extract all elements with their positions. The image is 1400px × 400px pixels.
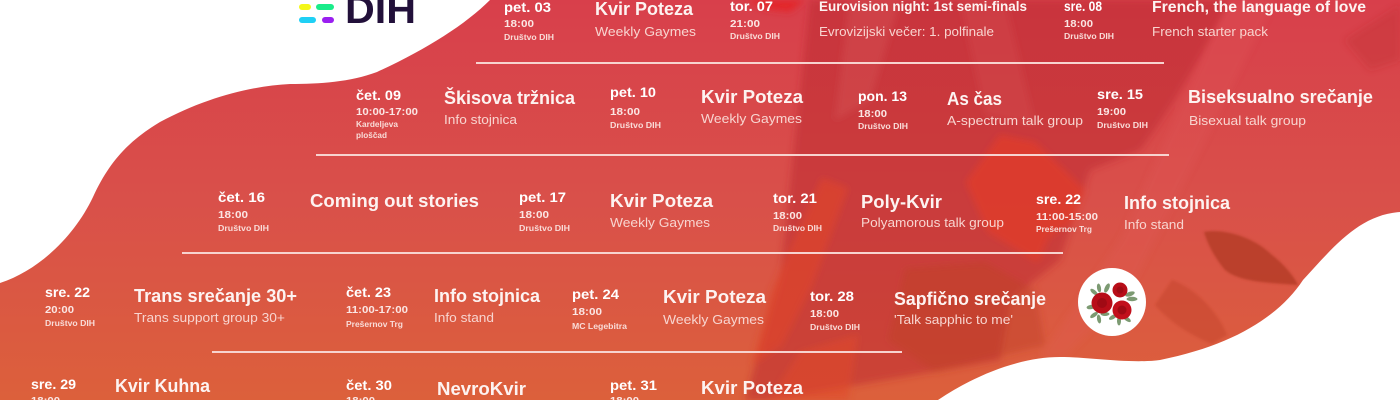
- event: pet. 24: pet. 24: [572, 286, 619, 302]
- event: sre. 15: Društvo DIH: [1097, 121, 1148, 130]
- event: pet. 24: [572, 286, 767, 331]
- event: tor. 28: 18:00: [810, 309, 839, 320]
- event: pet. 17: [519, 189, 714, 233]
- event: pet. 24: Weekly Gaymes: [663, 312, 765, 327]
- row 3 of events: [218, 189, 1231, 234]
- event: tor. 28: Sapfično srečanje: [894, 289, 1046, 309]
- event: tor. 28: tor. 28: [810, 288, 854, 304]
- event: tor. 21: [773, 190, 1004, 233]
- event: čet. 30: [346, 377, 526, 400]
- event: pet. 10: pet. 10: [610, 84, 656, 100]
- event: pon. 13: A-spectrum talk group: [947, 113, 1083, 128]
- event: pet. 03: Društvo DIH: [504, 33, 554, 42]
- event: sre. 22 trans group: [45, 284, 297, 328]
- event: čet. 09: Kardeljeva: [356, 120, 399, 129]
- event: pet. 31: Kvir Poteza: [701, 378, 804, 398]
- event: tor. 28: 'Talk sapphic to me': [894, 312, 1013, 327]
- event: pet. 03: Weekly Gaymes: [595, 24, 697, 39]
- event: sre. 15: Biseksualno srečanje: [1188, 87, 1373, 107]
- event: pet. 31: pet. 31: [610, 377, 657, 393]
- event: tor. 07: Evrovizijski večer: 1. polfinale: [819, 24, 994, 39]
- event: čet. 23: Info stojnica: [434, 286, 541, 306]
- icon: roses in white circle: [1078, 268, 1146, 336]
- event: pet. 17: Kvir Poteza: [610, 191, 714, 211]
- event: pon. 13: As čas: [947, 89, 1002, 109]
- event: sre. 22 info stand: sre. 22: [1036, 191, 1081, 207]
- event: tor. 21: Polyamorous talk group: [861, 215, 1004, 230]
- row 2 of events: [356, 84, 1373, 140]
- event: pon. 13: Društvo DIH: [858, 122, 908, 131]
- event: sre. 29: [31, 376, 211, 400]
- event: pet. 17: 18:00: [519, 210, 550, 221]
- event: pet. 10: Kvir Poteza: [701, 87, 804, 107]
- event: čet. 16: Društvo DIH: [218, 224, 269, 233]
- event: sre. 22 trans group: Društvo DIH: [45, 319, 95, 328]
- event: tor. 28: [810, 288, 1046, 332]
- row 4 of events: [45, 284, 1046, 332]
- event: sre. 22 info stand: [1036, 191, 1231, 234]
- event: čet. 09: Info stojnica: [444, 112, 518, 127]
- event: pet. 10: [610, 84, 804, 130]
- event: pet. 10: Weekly Gaymes: [701, 111, 803, 126]
- event: pon. 13: [858, 88, 1083, 131]
- event: pet. 10: 18:00: [610, 107, 641, 118]
- event: sre. 15: [1097, 86, 1373, 130]
- event: tor. 21: 18:00: [773, 211, 802, 222]
- event: pet. 10: Društvo DIH: [610, 121, 661, 130]
- event: sre. 22 trans group: 20:00: [45, 305, 74, 316]
- event: pon. 13: 18:00: [858, 109, 887, 120]
- event: sre. 08: 18:00: [1064, 19, 1093, 30]
- event: sre. 22 trans group: Trans support group 30+: [134, 310, 285, 325]
- event: sre. 22 info stand: Info stand: [1124, 217, 1184, 232]
- logo: DIH: [299, 0, 416, 32]
- event: pet. 03: 18:00: [504, 19, 535, 30]
- event: tor. 07: Društvo DIH: [730, 32, 780, 41]
- row 1 of events: [504, 0, 1366, 42]
- event: čet. 16: čet. 16: [218, 189, 265, 205]
- event: sre. 08: Društvo DIH: [1064, 32, 1114, 41]
- event: pet. 24: MC Legebitra: [572, 322, 628, 331]
- event: pet. 24: 18:00: [572, 307, 603, 318]
- event: tor. 07: [730, 0, 1027, 41]
- event: pet. 31: [610, 377, 804, 400]
- event: čet. 09: ploščad: [356, 131, 387, 140]
- event: pet. 03: [504, 0, 697, 42]
- event: čet. 09: čet. 09: [356, 87, 401, 103]
- event: sre. 22 trans group: Trans srečanje 30+: [134, 286, 297, 306]
- event: pon. 13: pon. 13: [858, 88, 907, 104]
- event: čet. 30: čet. 30: [346, 377, 392, 393]
- event: čet. 23: Info stand: [434, 310, 494, 325]
- event: čet. 23: čet. 23: [346, 284, 391, 300]
- event: sre. 29: sre. 29: [31, 376, 76, 392]
- event: sre. 15: 19:00: [1097, 107, 1126, 118]
- event: čet. 16: 18:00: [218, 210, 249, 221]
- event: sre. 15: Bisexual talk group: [1189, 113, 1306, 128]
- event: čet. 23: Prešernov Trg: [346, 320, 403, 329]
- event: tor. 07: 21:00: [730, 19, 761, 30]
- event: čet. 09: Škisova tržnica: [444, 87, 576, 108]
- event: sre. 15: sre. 15: [1097, 86, 1143, 102]
- event: tor. 21: tor. 21: [773, 190, 817, 206]
- event: pet. 17: Weekly Gaymes: [610, 215, 711, 230]
- event: sre. 08: French starter pack: [1152, 24, 1269, 39]
- event: čet. 30: NevroKvir: [437, 379, 526, 399]
- event: sre. 22 info stand: Info stojnica: [1124, 193, 1231, 213]
- event: tor. 21: Poly-Kvir: [861, 192, 942, 212]
- event: sre. 08: [1064, 0, 1366, 41]
- event: tor. 28: Društvo DIH: [810, 323, 860, 332]
- event: čet. 09: [356, 87, 576, 140]
- event: sre. 29: Kvir Kuhna: [115, 376, 211, 396]
- event: sre. 22 trans group: sre. 22: [45, 284, 90, 300]
- row 5 of events: [31, 376, 804, 400]
- event: pet. 24: Kvir Poteza: [663, 287, 767, 307]
- event: čet. 16: [218, 189, 479, 233]
- event: tor. 21: Društvo DIH: [773, 224, 822, 233]
- event: čet. 16: Coming out stories: [310, 191, 479, 211]
- event: čet. 23: [346, 284, 541, 329]
- event: pet. 17: pet. 17: [519, 189, 566, 205]
- event: čet. 09: 10:00-17:00: [356, 107, 418, 118]
- event: sre. 22 info stand: Prešernov Trg: [1036, 225, 1092, 234]
- event: čet. 23: 11:00-17:00: [346, 305, 408, 316]
- event: pet. 17: Društvo DIH: [519, 224, 570, 233]
- event: sre. 22 info stand: 11:00-15:00: [1036, 212, 1098, 223]
